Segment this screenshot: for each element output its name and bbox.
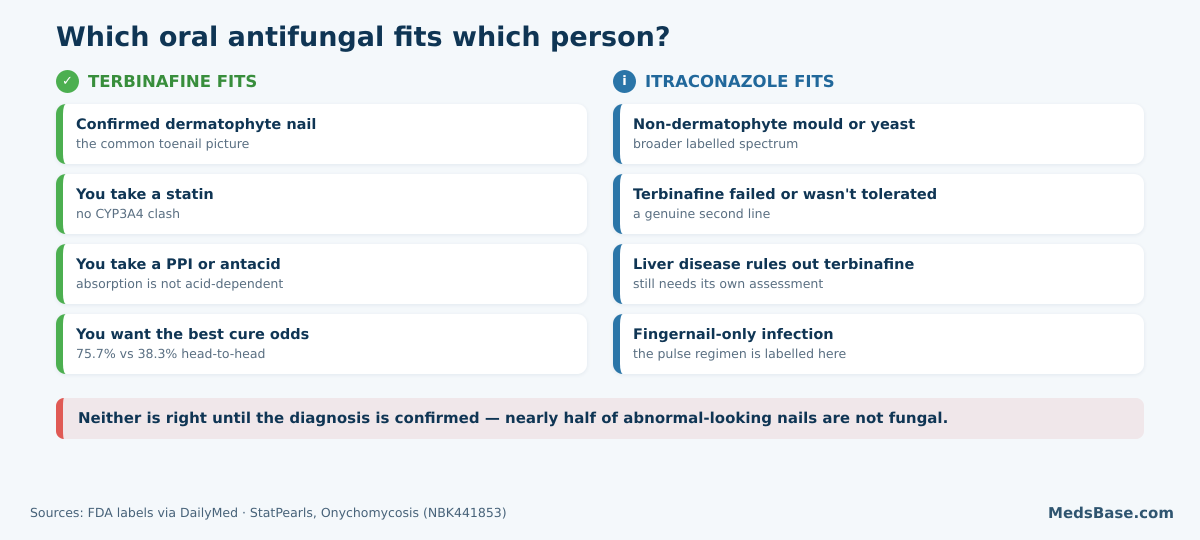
heading: terbinafine fits: TERBINAFINE FITS xyxy=(88,72,257,91)
heading: itraconazole fits: ITRACONAZOLE FITS xyxy=(645,72,835,91)
card: you want the best cure odds xyxy=(56,314,587,374)
brand: MedsBase.com xyxy=(1048,504,1174,522)
card: you take a statin: no CYP3A4 clash xyxy=(76,206,180,221)
icon: check mark xyxy=(56,70,79,93)
icon: info: i xyxy=(622,74,627,89)
card: liver disease xyxy=(613,244,1144,304)
card: terbinafine failed: Terbinafine failed or wasn't tolerated xyxy=(633,187,937,203)
card: liver disease: still needs its own assessment xyxy=(633,276,823,291)
card: confirmed dermatophyte nail: the common toenail picture xyxy=(76,136,249,151)
card: you want the best cure odds: You want the best cure odds xyxy=(76,327,309,343)
card: terbinafine failed xyxy=(613,174,1144,234)
card: confirmed dermatophyte nail: Confirmed dermatophyte nail xyxy=(76,117,316,133)
card: terbinafine failed: a genuine second line xyxy=(633,206,770,221)
card: you take a PPI or antacid xyxy=(56,244,587,304)
icon: info xyxy=(613,70,636,93)
panel: itraconazole fits xyxy=(612,70,1144,376)
sources: Sources: FDA labels via DailyMed · StatPearls, Onychomycosis (NBK441853) xyxy=(30,505,507,520)
card: liver disease: Liver disease rules out terbinafine xyxy=(633,257,914,273)
card: fingernail-only infection xyxy=(613,314,1144,374)
card: confirmed dermatophyte nail xyxy=(56,104,587,164)
card: fingernail-only infection: the pulse regimen is labelled here xyxy=(633,346,846,361)
card: you take a PPI or antacid: absorption is not acid-dependent xyxy=(76,276,283,291)
icon: check mark: ✓ xyxy=(62,74,73,89)
card: non-dermatophyte mould or yeast: broader labelled spectrum xyxy=(633,136,798,151)
card: you take a statin: You take a statin xyxy=(76,187,214,203)
panel: terbinafine fits xyxy=(56,70,588,376)
callout text: Neither is right until the diagnosis is confirmed — nearly half of abnormal-looking nails are not fungal. xyxy=(78,409,948,427)
card: you want the best cure odds: 75.7% vs 38.3% head-to-head xyxy=(76,346,265,361)
card: non-dermatophyte mould or yeast xyxy=(613,104,1144,164)
card: non-dermatophyte mould or yeast: Non-dermatophyte mould or yeast xyxy=(633,117,915,133)
card: you take a statin xyxy=(56,174,587,234)
card: you take a PPI or antacid: You take a PPI or antacid xyxy=(76,257,281,273)
callout xyxy=(56,398,1144,439)
card: fingernail-only infection: Fingernail-only infection xyxy=(633,327,834,343)
title: Which oral antifungal fits which person? xyxy=(56,22,671,53)
